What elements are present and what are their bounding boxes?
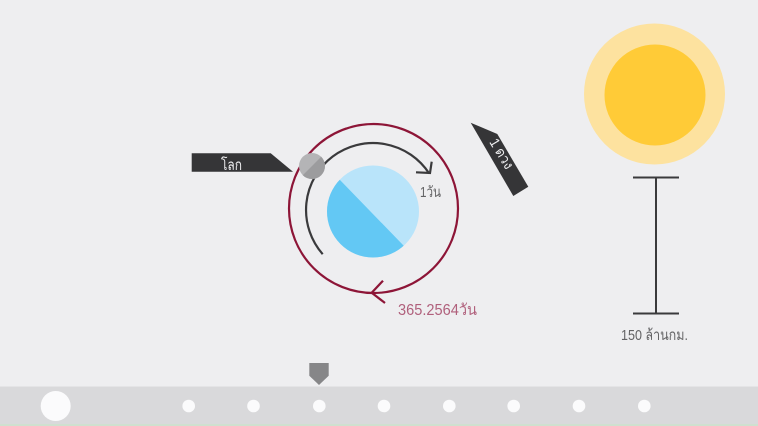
timeline stop: current (41, 391, 71, 421)
one-day label: 1วัน (420, 184, 441, 201)
earth orbit ring with arrow (289, 124, 458, 303)
one-day rotation arrow (306, 143, 432, 254)
label tag: earth (192, 153, 293, 174)
label tag: earth: โลก (221, 156, 242, 174)
sun icon (584, 24, 725, 164)
timeline bar (0, 386, 758, 426)
label tag: one star (471, 123, 528, 196)
distance bracket: 150 million km (621, 178, 688, 344)
timeline stops (182, 400, 651, 412)
earth marker (299, 153, 325, 179)
label tag: one star: 1 ดวง (486, 135, 517, 172)
distance label: 150 ล้านกม. (621, 327, 688, 344)
sun-side blue disc (327, 166, 419, 258)
timeline marker (309, 363, 329, 385)
orbit label: 365.2564 days: 365.2564วัน (398, 302, 477, 319)
